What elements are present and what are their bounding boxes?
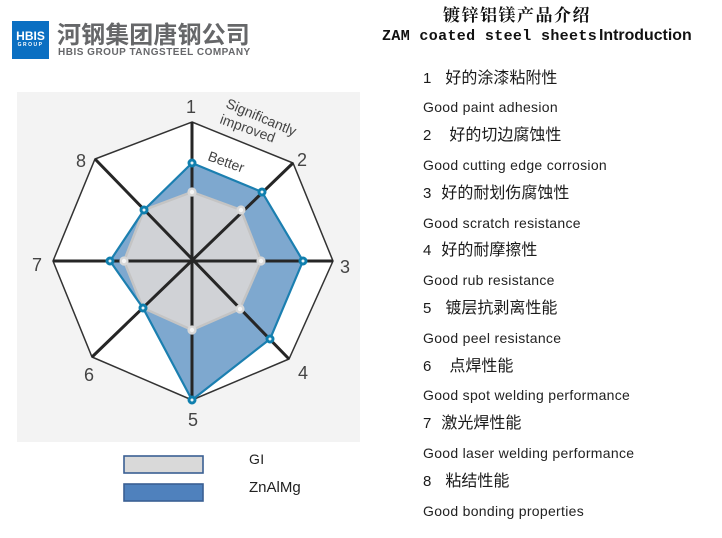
annotation: significantly improved: Significantly [224,95,299,139]
item 6: 6 点焊性能 [423,358,513,375]
logo: English company name: HBIS GROUP TANGSTEEL COMPANY [58,47,251,58]
annotation: better: Better [206,148,247,176]
axis labels: 5 [188,410,198,430]
feature list: Good scratch resistance [423,215,581,231]
axis labels [32,97,350,430]
logo: Chinese company name: 河钢集团唐钢公司 [57,15,250,50]
feature list: Good rub resistance [423,272,555,288]
feature list: Good peel resistance [423,330,561,346]
series: ZnAlMg area [110,163,303,400]
series: GI area [124,192,261,330]
feature list: Good laser welding performance [423,445,634,461]
feature list: Good bonding properties [423,503,584,519]
legend label: ZnAlMg: ZnAlMg [249,479,301,496]
logo: blue HBIS square [12,21,49,59]
title: English [382,27,692,45]
axis labels: 4 [298,363,308,383]
title: English: ZAM coated steel sheets [382,28,597,45]
series: ZnAlMg outline [110,163,303,400]
legend label: GI: GI [249,451,264,467]
title: Chinese: 镀锌铝镁产品介绍 [443,1,591,26]
item 2: 2 好的切边腐蚀性 [423,127,561,144]
item 3: 3 好的耐划伤腐蚀性 [423,185,569,202]
axis labels: 1 [186,97,196,117]
axis labels: 8 [76,151,86,171]
GI markers [121,189,264,333]
legend swatch: ZnAlMg [124,484,203,501]
item 5: 5 镀层抗剥离性能 [423,300,557,317]
feature list: Good cutting edge corrosion [423,157,607,173]
outer octagon [53,122,333,400]
item 1: 1 好的涂漆粘附性 [423,70,557,87]
logo: blue HBIS square: HBIS [16,29,45,43]
item 7: 7 激光焊性能 [423,415,521,432]
title: English: Introduction [599,27,692,44]
item 4: 4 好的耐摩擦性 [423,242,537,259]
axis labels: 7 [32,255,42,275]
feature list: Good spot welding performance [423,387,630,403]
axis labels: 6 [84,365,94,385]
item 8: 8 粘结性能 [423,473,509,490]
annotation: significantly improved: improved [218,111,278,146]
legend swatch: GI [124,456,203,473]
axes [53,122,333,400]
feature list: Good paint adhesion [423,99,558,115]
logo [12,15,251,59]
logo: blue HBIS square: GROUP [18,42,43,48]
ZnAlMg markers [107,160,306,403]
axis labels: 3 [340,257,350,277]
axis labels: 2 [297,150,307,170]
feature list [423,69,634,519]
panel background [17,92,360,442]
